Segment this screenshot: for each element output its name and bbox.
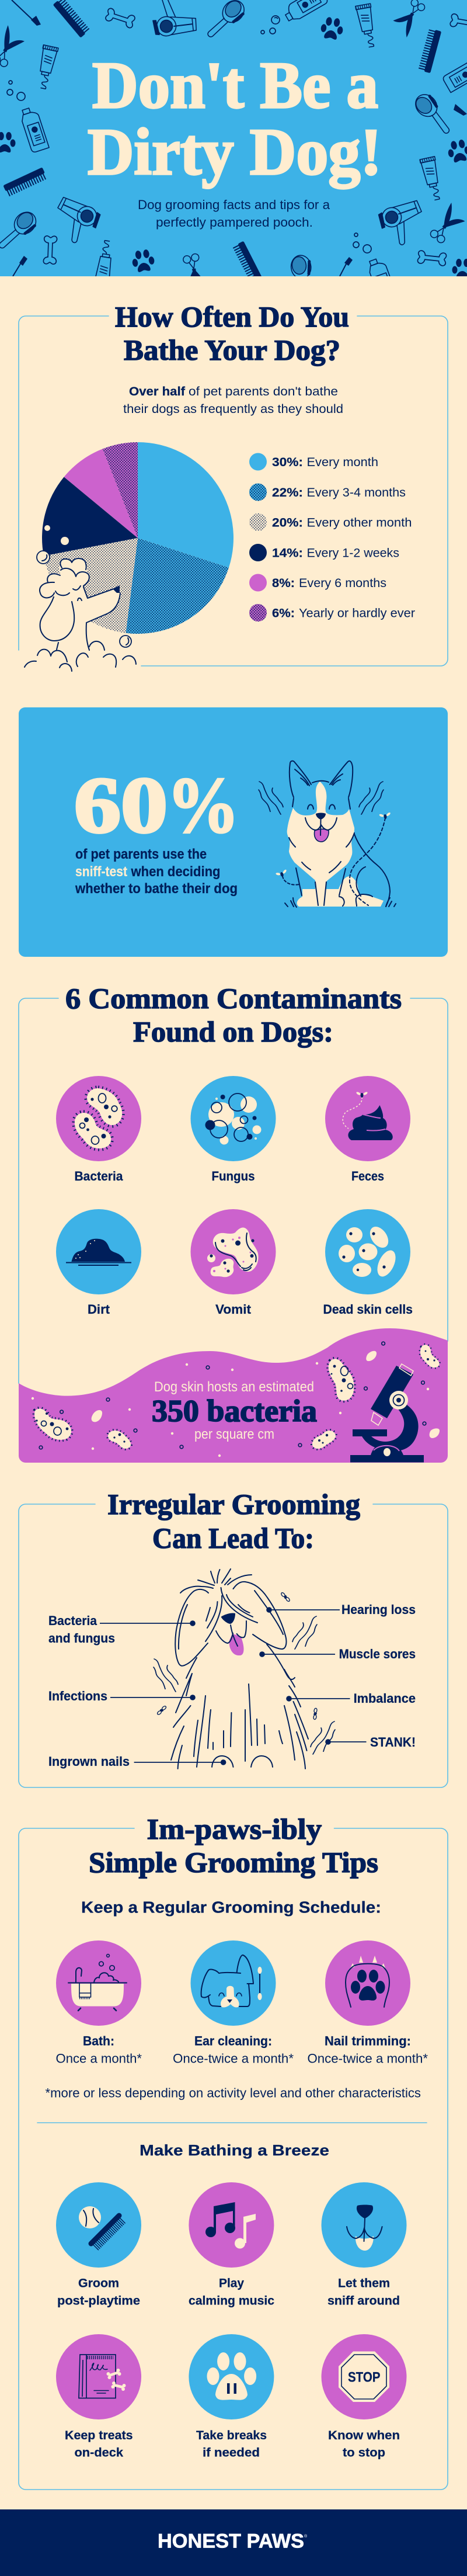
icon: smelly dog (259, 761, 396, 907)
intro text: of pet parents don't bathe (189, 384, 338, 398)
intro text (123, 384, 343, 416)
callout: infections: Infections (48, 1689, 107, 1703)
icon: dead skin cells (325, 1209, 410, 1294)
label: take breaks: if needed (203, 2446, 260, 2459)
label: keep treats (65, 2429, 133, 2459)
heading: Bathe Your Dog? (124, 334, 340, 366)
legend: 20%: (272, 515, 303, 529)
heading: Im-paws-ibly (147, 1813, 322, 1845)
callout: ingrown nails (48, 1754, 226, 1769)
icon: ear cleaning (190, 1940, 276, 2026)
icon: ball and comb (56, 2182, 141, 2268)
label: play: Play (219, 2277, 244, 2290)
stat caption: sniff-test (75, 864, 127, 880)
icon: vomit (190, 1209, 276, 1294)
callout text: 350 bacteria (152, 1394, 317, 1428)
legend: Every month (307, 455, 378, 469)
legend: 22%: (272, 485, 303, 499)
callout: bacteria wave (19, 1328, 448, 1463)
label: know when: Know when (328, 2429, 400, 2442)
label: bath (56, 2034, 142, 2065)
footer (0, 2509, 467, 2576)
footer: HONEST PAWS (158, 2530, 304, 2553)
legend: Yearly or hardly ever (299, 606, 415, 620)
panel: grooming tips (19, 1813, 448, 2490)
subheading: make bathing a breeze: Make Bathing a Breeze (140, 2141, 329, 2159)
legend: 30%: (272, 455, 303, 469)
label: play: calming music (189, 2294, 274, 2307)
label: nail trimming (307, 2034, 428, 2065)
label: nail trimming: Once-twice a month* (307, 2051, 428, 2065)
callout: stank (325, 1735, 416, 1749)
icon: microscope (350, 1364, 424, 1463)
stat caption: of pet parents use the (75, 846, 207, 862)
icon: feces (325, 1076, 410, 1161)
label: take breaks: Take breaks (196, 2429, 267, 2442)
legend: Every 1-2 weeks (307, 546, 399, 560)
heading: How Often Do You (115, 300, 349, 333)
intro text: their dogs as frequently as they should (123, 402, 343, 416)
legend: 6%: (272, 606, 295, 620)
title: Dirty Dog! (88, 116, 382, 189)
panel: how often do you bathe (19, 300, 448, 672)
icon: bacteria (56, 1076, 141, 1161)
callout text (152, 1379, 317, 1442)
callout: ingrown nails: Ingrown nails (48, 1754, 130, 1769)
icon: dirt (56, 1209, 141, 1294)
footnote: *more or less depending on activity level and other characteristics (46, 2085, 421, 2101)
heading (89, 1813, 378, 1879)
hero icon pattern (0, 0, 467, 304)
label: let them sniff (327, 2277, 400, 2307)
callout: bacteria and fungus: and fungus (48, 1631, 115, 1645)
heading: Can Lead To: (152, 1522, 314, 1554)
panel: 60 percent stat (19, 707, 448, 957)
label: groom (57, 2277, 140, 2307)
callout: muscle sores (259, 1647, 416, 1661)
callout: stank: STANK! (370, 1735, 416, 1749)
heading: 6 Common Contaminants (65, 982, 402, 1015)
title: Don't Be a (92, 49, 378, 122)
callout text: Dog skin hosts an estimated (154, 1379, 314, 1395)
label: dead skin cells: Dead skin cells (323, 1302, 413, 1317)
callout: bacteria and fungus (48, 1613, 196, 1645)
icon: dog nose (321, 2182, 406, 2268)
legend: Every other month (307, 515, 412, 529)
icon: fungus (190, 1076, 276, 1161)
subheading: schedule: Keep a Regular Grooming Schedule: (81, 1898, 381, 1916)
subtitle (138, 197, 330, 230)
icon: treats notebook (56, 2334, 141, 2419)
stat caption: whether to bathe their dog (75, 881, 238, 897)
title (88, 49, 382, 189)
label: let them sniff: Let them (338, 2277, 390, 2290)
callout: bacteria and fungus: Bacteria (48, 1613, 97, 1628)
label: ear cleaning: Once-twice a month* (173, 2051, 294, 2065)
label: ear cleaning (173, 2034, 294, 2065)
label: keep treats: on-deck (75, 2446, 123, 2459)
panel: common contaminants (19, 982, 448, 1463)
callout: hearing loss (266, 1602, 416, 1617)
big number: 60 (74, 762, 168, 849)
label: groom: post-playtime (57, 2294, 140, 2307)
label: know when: to stop (343, 2446, 385, 2459)
footer: ® (304, 2534, 308, 2539)
label: ear cleaning: Ear cleaning: (194, 2034, 272, 2048)
legend: 8%: (272, 576, 295, 590)
label: vomit: Vomit (215, 1302, 252, 1317)
heading: Simple Grooming Tips (89, 1846, 378, 1879)
legend: Every 3-4 months (307, 485, 406, 499)
callout: infections (48, 1689, 196, 1703)
big number (74, 762, 239, 849)
heading (65, 982, 402, 1048)
label: feces: Feces (351, 1169, 384, 1183)
intro text: Over half (129, 384, 186, 398)
heading (107, 1488, 360, 1554)
icon: music notes (189, 2182, 274, 2268)
icon: poodle (21, 551, 140, 672)
legend (249, 453, 415, 622)
heading: Irregular Grooming (107, 1488, 360, 1520)
label: dirt: Dirt (88, 1302, 110, 1317)
label: nail trimming: Nail trimming: (325, 2034, 411, 2048)
label: know when (328, 2429, 400, 2459)
pie chart (42, 442, 234, 634)
illustration: shaggy dog (154, 1569, 335, 1769)
label: let them sniff: sniff around (327, 2294, 400, 2307)
heading (115, 300, 349, 366)
icon: stop sign: STOP (348, 2369, 381, 2386)
label: fungus: Fungus (211, 1169, 255, 1183)
label: play (189, 2277, 274, 2307)
callout: hearing loss: Hearing loss (341, 1602, 416, 1617)
subtitle: Dog grooming facts and tips for a (138, 197, 330, 212)
hero banner (0, 0, 467, 304)
icon: paw pause (189, 2334, 274, 2419)
label: keep treats: Keep treats (65, 2429, 133, 2442)
heading: Found on Dogs: (133, 1015, 333, 1048)
stat caption: when deciding (131, 864, 221, 880)
callout: imbalance: Imbalance (354, 1691, 416, 1706)
panel: irregular grooming (19, 1488, 448, 1787)
icon: bath (56, 1940, 141, 2026)
label: bath: Once a month* (56, 2051, 142, 2065)
callout text: per square cm (194, 1426, 274, 1442)
big number: % (167, 762, 239, 849)
callout: imbalance (286, 1691, 416, 1706)
label: bath: Bath: (83, 2034, 114, 2048)
legend: Every 6 months (299, 576, 386, 590)
subtitle: perfectly pampered pooch. (156, 215, 313, 230)
label: bacteria: Bacteria (75, 1169, 123, 1183)
callout: muscle sores: Muscle sores (339, 1647, 416, 1661)
label: take breaks (196, 2429, 267, 2459)
label: groom: Groom (78, 2277, 119, 2290)
icon: nail trimming (325, 1940, 410, 2026)
legend: 14%: (272, 546, 303, 560)
stat caption (75, 846, 238, 897)
icon: stop sign (321, 2334, 406, 2419)
